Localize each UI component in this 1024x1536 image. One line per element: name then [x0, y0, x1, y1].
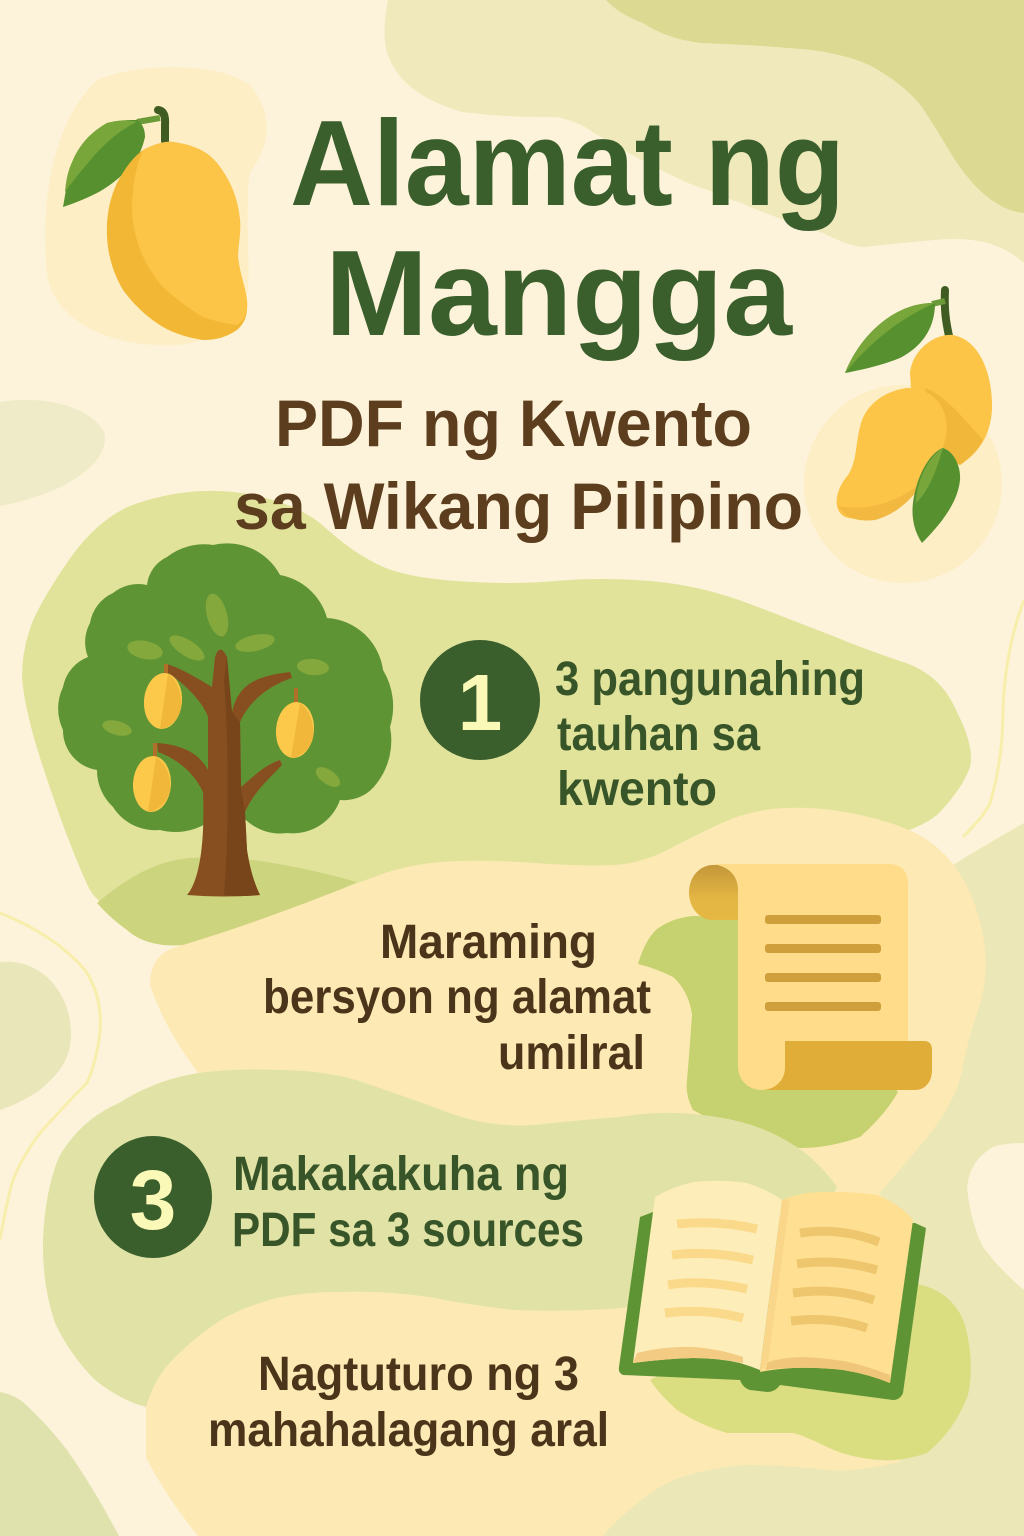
badge: number 3: [94, 1136, 212, 1258]
subtitle: PDF ng Kwento: [275, 386, 752, 460]
panel: green blob behind book: [650, 1283, 971, 1460]
panel: scroll background: [638, 916, 898, 1148]
title: Alamat ng: [290, 95, 845, 231]
icon: open book: [619, 1181, 926, 1400]
icon: mangoes right: [837, 290, 992, 543]
text: item 1: tauhan sa: [557, 708, 760, 761]
icon: scroll: [689, 864, 932, 1090]
icon: mango top left: [63, 110, 247, 340]
text: item 2: Maraming: [380, 916, 597, 969]
text: item 4: Nagtuturo ng 3: [258, 1348, 579, 1401]
subtitle: sa Wikang Pilipino: [234, 469, 803, 543]
panel: item 2 and 4 background: [146, 808, 986, 1536]
badge: number 1: [420, 640, 540, 760]
thin curve lines: [0, 600, 1024, 1240]
halo: top mango: [45, 67, 266, 345]
icon: mango tree: [58, 543, 393, 896]
text: item 2: bersyon ng alamat: [263, 971, 651, 1024]
text: item 2: umilral: [498, 1027, 645, 1080]
subtitle: [234, 386, 803, 543]
text: item 1: kwento: [557, 763, 717, 816]
halo: right mangoes: [804, 385, 1002, 583]
text: item 2: [263, 916, 651, 1080]
text: item 1: [555, 653, 865, 816]
text: item 3: PDF sa 3 sources: [232, 1204, 584, 1257]
text: item 3: [232, 1148, 584, 1257]
title: Mangga: [325, 225, 793, 361]
text: item 4: mahahalagang aral: [208, 1404, 609, 1457]
text: item 1: 3 pangunahing: [555, 653, 865, 706]
panel: item 3 background: [43, 1069, 837, 1407]
badge: number 1: 1: [458, 658, 502, 747]
text: item 3: Makakakuha ng: [233, 1148, 569, 1201]
text: item 4: [208, 1348, 609, 1457]
badge: number 3: 3: [130, 1153, 176, 1247]
panel: item 1 background: [22, 491, 971, 934]
title: [290, 95, 845, 361]
panel: hill: [97, 858, 357, 945]
